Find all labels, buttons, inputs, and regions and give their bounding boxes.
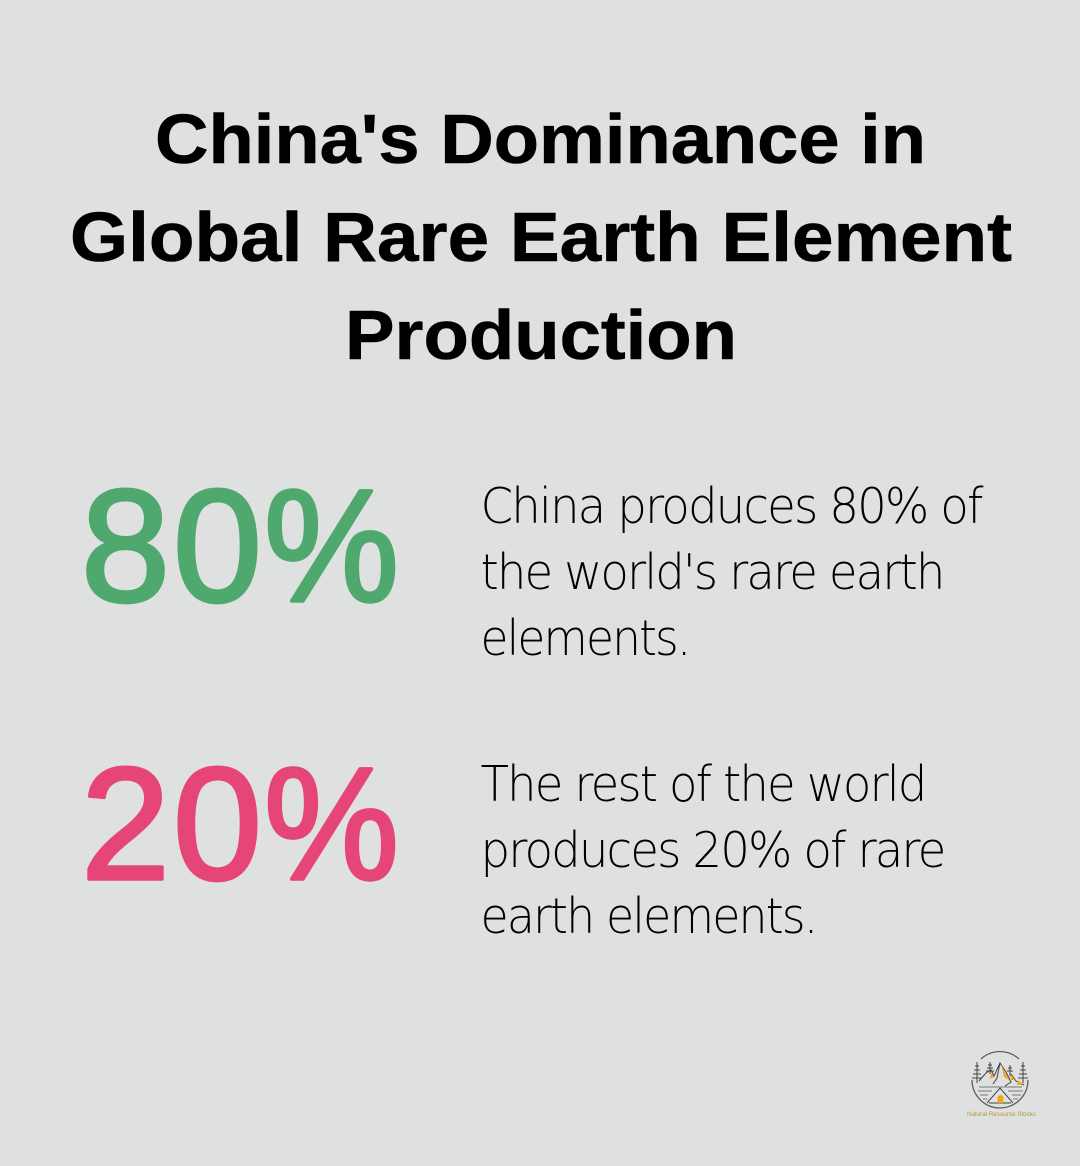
icon: mountains [979, 1063, 1024, 1086]
text block: rest of world share: produces 20% of rare [480, 822, 944, 879]
stat: 80%: 0 [173, 456, 262, 635]
stat: 80%: 8 [81, 456, 170, 635]
icon: water lines [978, 1087, 1023, 1099]
stat: 20%: 2 [81, 734, 170, 913]
icon: circular badge outline [972, 1052, 1028, 1108]
stat: 20%: % [264, 734, 399, 913]
text block: China share: the world's rare earth [480, 544, 944, 601]
icon: pine trees [972, 1062, 1028, 1083]
text block: rest of world share [480, 756, 944, 945]
text block: China share: China produces 80% of [480, 478, 984, 535]
title: China's Dominance in [155, 100, 926, 178]
text block: China share: elements. [480, 610, 690, 667]
stat: 20%: 0 [173, 734, 262, 913]
stat: 80%: % [264, 456, 399, 635]
logo: Natural Resource Stocks [967, 1052, 1037, 1118]
stat: 80% [81, 456, 399, 635]
title: Global Rare Earth Element [70, 198, 1012, 276]
stat: 20% [81, 734, 399, 913]
logo caption: Natural Resource Stocks [967, 1111, 1037, 1118]
title: Production [345, 296, 737, 374]
icon: tent [987, 1088, 1013, 1103]
title [70, 100, 1012, 374]
text block: rest of world share: The rest of the world [480, 756, 926, 813]
text block: rest of world share: earth elements. [480, 888, 816, 945]
text block: China share [480, 478, 984, 667]
